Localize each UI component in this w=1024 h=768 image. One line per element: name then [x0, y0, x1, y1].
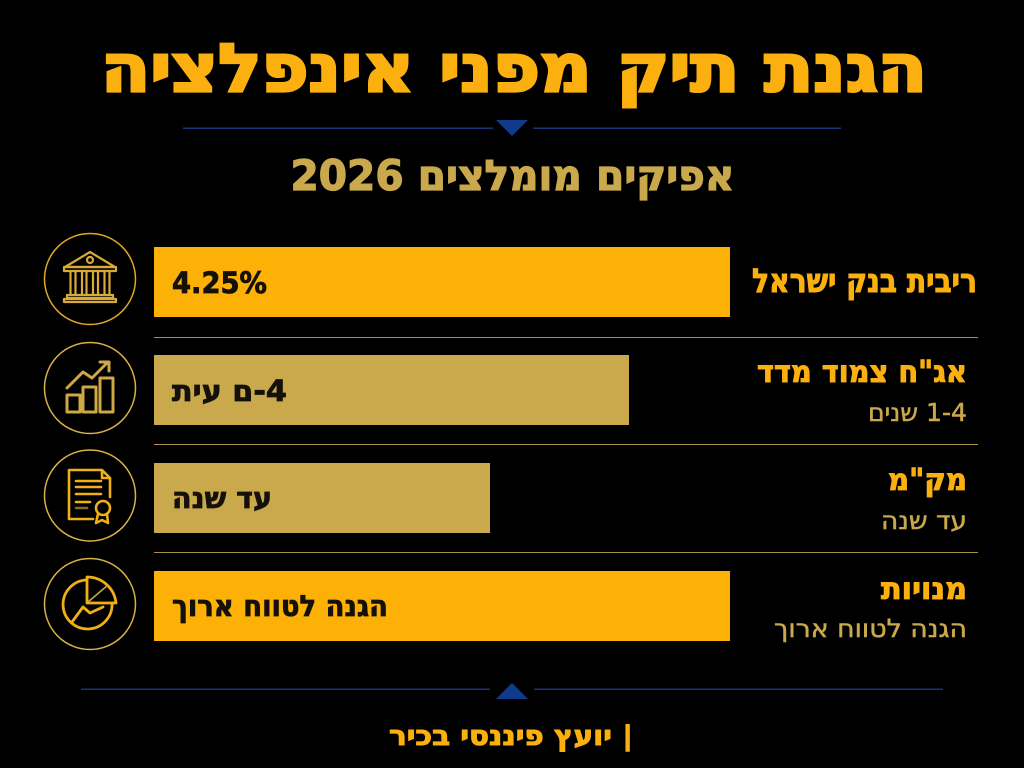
- subtitle: אפיקים מומלצים 2026: [290, 151, 734, 200]
- row label: מק"מ: [888, 463, 967, 498]
- row 3: Makam: [44, 450, 967, 541]
- row 4: Stocks: [44, 558, 967, 650]
- row label: אג"ח צמוד מדד: [757, 355, 967, 390]
- bar value: 4-ם עית: [172, 374, 287, 408]
- icon: certificate: [44, 450, 136, 541]
- row sublabel: עד שנה: [881, 506, 967, 535]
- row label: ריבית בנק ישראל: [752, 261, 977, 300]
- top divider with down triangle: [183, 120, 841, 136]
- icon: growth chart: [44, 342, 136, 434]
- icon: pie chart: [44, 558, 136, 650]
- bar value: 4.25%: [172, 266, 267, 300]
- row 2: CPI-linked bonds: [44, 342, 967, 434]
- icon: bank: [44, 234, 136, 324]
- footer credit: | יועץ פיננסי בכיר: [389, 721, 633, 752]
- bar: long-term protection: [154, 571, 730, 641]
- row sublabel: הגנה לטווח ארוך: [774, 614, 967, 643]
- row dividers: [154, 337, 978, 553]
- row label: מנויות: [881, 572, 967, 607]
- bar value: הגנה לטווח ארוך: [172, 589, 388, 623]
- bar: 4 years: [154, 355, 629, 425]
- title: הגנת תיק מפני אינפלציה: [101, 30, 927, 107]
- row sublabel: 1-4 שנים: [868, 398, 967, 427]
- row 1: Bank of Israel rate: [44, 234, 977, 324]
- bottom divider with up triangle: [81, 683, 943, 699]
- bar value: עד שנה: [172, 481, 272, 515]
- bar: 4.25%: [154, 247, 730, 317]
- bar: up to a year: [154, 463, 490, 533]
